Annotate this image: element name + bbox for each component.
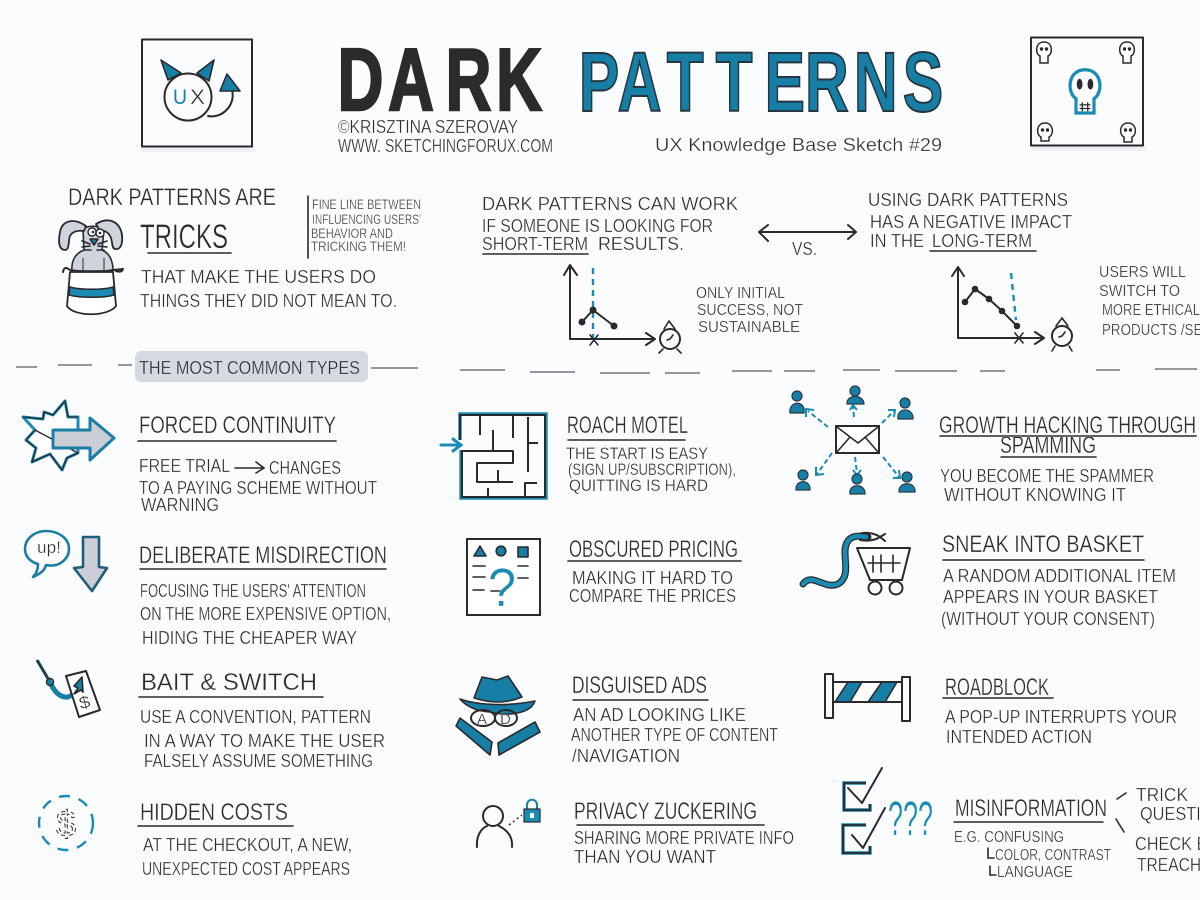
caption: only initial success: ONLY INITIAL bbox=[696, 285, 785, 302]
description: SHARING MORE PRIVATE INFO bbox=[574, 828, 794, 848]
pattern: roadblock bbox=[825, 674, 1177, 747]
heading: ROACH MOTEL bbox=[567, 412, 688, 439]
title: DARK bbox=[338, 32, 542, 130]
icon: alarm clock bbox=[1052, 318, 1072, 351]
description: IN A WAY TO MAKE THE USER bbox=[144, 731, 385, 751]
heading: SPAMMING bbox=[1000, 432, 1096, 459]
icon: speech bubble and down arrow bbox=[25, 531, 107, 591]
caption: users will switch: SWITCH TO bbox=[1099, 283, 1180, 300]
heading: HIDDEN COSTS bbox=[140, 799, 288, 826]
icon: skulls in a box bbox=[1031, 38, 1146, 151]
pattern: privacy zuckering bbox=[477, 798, 794, 867]
pattern: disguised ads bbox=[456, 672, 778, 766]
short-term text: RESULTS. bbox=[598, 234, 684, 254]
icon: person and padlock bbox=[477, 800, 540, 847]
short-term text: DARK PATTERNS CAN WORK bbox=[482, 194, 738, 214]
description: AT THE CHECKOUT, A NEW, bbox=[143, 835, 352, 855]
description bbox=[566, 444, 736, 495]
description: THE START IS EASY bbox=[566, 444, 708, 463]
description: APPEARS IN YOUR BASKET bbox=[943, 587, 1158, 607]
pattern: misinformation bbox=[843, 768, 1200, 881]
description: YOU BECOME THE SPAMMER bbox=[940, 466, 1154, 486]
icon: hook and bait note bbox=[37, 660, 100, 717]
description: /NAVIGATION bbox=[572, 746, 680, 766]
short-term text: IF SOMEONE IS LOOKING FOR bbox=[482, 216, 713, 236]
pattern: deliberate misdirection bbox=[25, 531, 391, 648]
description: E.G. CONFUSING bbox=[954, 829, 1064, 846]
description bbox=[941, 566, 1176, 629]
arrow: versus bbox=[759, 225, 856, 259]
chart: short-term success bbox=[564, 265, 655, 345]
pattern: bait and switch bbox=[37, 660, 385, 771]
section heading: the most common types: THE MOST COMMON TYPES bbox=[139, 358, 360, 378]
description bbox=[140, 707, 385, 771]
caption: only initial success: SUSTAINABLE bbox=[698, 319, 800, 336]
heading: FORCED CONTINUITY bbox=[139, 412, 336, 439]
title: PATTERNS bbox=[579, 35, 943, 129]
icon: UX devil in a box: U bbox=[173, 86, 187, 109]
icon: snake and shopping cart bbox=[803, 533, 910, 594]
description bbox=[571, 705, 778, 766]
short-term text bbox=[482, 194, 738, 254]
definition text bbox=[140, 267, 397, 311]
description: THAN YOU WANT bbox=[574, 847, 716, 867]
long-term text: LONG-TERM bbox=[932, 231, 1032, 251]
heading: OBSCURED PRICING bbox=[569, 536, 738, 563]
heading: DISGUISED ADS bbox=[572, 672, 707, 699]
description: USE A CONVENTION, PATTERN bbox=[140, 707, 371, 727]
icon: checkboxes and question marks: ??? bbox=[888, 793, 933, 846]
icon: road barrier bbox=[825, 674, 910, 721]
author credit bbox=[338, 117, 553, 156]
description bbox=[574, 828, 794, 867]
pattern: growth hacking through spamming bbox=[790, 386, 1196, 505]
heading: BAIT & SWITCH bbox=[141, 669, 317, 696]
icon: price sheet with question mark bbox=[467, 539, 540, 618]
description bbox=[142, 835, 352, 879]
pattern: sneak into basket bbox=[803, 531, 1176, 629]
icon: dashed circle with dollar: $ bbox=[56, 803, 76, 844]
icon: rabbit in a hat bbox=[59, 220, 123, 314]
long-term text: HAS A NEGATIVE IMPACT bbox=[870, 212, 1072, 232]
definition lead-in: DARK PATTERNS ARE bbox=[68, 184, 276, 211]
heading: PRIVACY ZUCKERING bbox=[574, 798, 757, 825]
description: (SIGN UP/SUBSCRIPTION), bbox=[568, 460, 736, 479]
long-term text: USING DARK PATTERNS bbox=[868, 190, 1068, 210]
description: LANGUAGE bbox=[997, 864, 1073, 881]
subtitle: UX Knowledge Base Sketch #29 bbox=[655, 135, 942, 155]
title bbox=[338, 32, 943, 130]
arrow: versus: VS. bbox=[792, 239, 817, 259]
pattern: hidden costs bbox=[39, 796, 352, 879]
heading: DELIBERATE MISDIRECTION bbox=[139, 542, 387, 569]
side note: FINE LINE BETWEEN bbox=[312, 196, 421, 212]
icon: dashed circle with dollar bbox=[39, 796, 93, 850]
icon: checkboxes and question marks bbox=[843, 768, 933, 853]
description: FREE TRIAL bbox=[139, 456, 230, 476]
definition text: THAT MAKE THE USERS DO bbox=[141, 267, 376, 287]
panel: long-term impact bbox=[868, 190, 1200, 351]
short-term text: SHORT-TERM bbox=[482, 234, 588, 254]
icon: speech bubble and down arrow: up! bbox=[37, 538, 61, 557]
description: FALSELY ASSUME SOMETHING bbox=[144, 751, 373, 771]
description: QUITTING IS HARD bbox=[569, 476, 708, 495]
description: TO A PAYING SCHEME WITHOUT bbox=[139, 478, 377, 498]
description bbox=[940, 466, 1154, 505]
description: COLOR, CONTRAST bbox=[995, 847, 1111, 864]
description: HIDING THE CHEAPER WAY bbox=[142, 628, 357, 648]
icon: UX devil in a box bbox=[141, 40, 256, 152]
side note: INFLUENCING USERS' bbox=[312, 211, 421, 227]
icon: hook and bait note: $ bbox=[77, 692, 93, 713]
heading bbox=[939, 412, 1196, 459]
icon: envelope sending to users bbox=[790, 386, 915, 494]
icon: burst and arrow bbox=[23, 401, 114, 470]
icon: spy with hat and glasses: D bbox=[500, 711, 511, 728]
description: (WITHOUT YOUR CONSENT) bbox=[941, 609, 1155, 629]
caption: only initial success: SUCCESS, NOT bbox=[697, 302, 803, 319]
description bbox=[569, 568, 736, 606]
pattern: forced continuity bbox=[23, 401, 377, 515]
heading: ROADBLOCK bbox=[945, 674, 1049, 701]
description: MAKING IT HARD TO bbox=[572, 568, 733, 588]
description: ANOTHER TYPE OF CONTENT bbox=[571, 725, 778, 745]
heading bbox=[567, 412, 688, 440]
description: A RANDOM ADDITIONAL ITEM bbox=[943, 566, 1176, 586]
description: COMPARE THE PRICES bbox=[569, 586, 736, 606]
author credit: WWW. SKETCHINGFORUX.COM bbox=[338, 136, 553, 156]
branch: trick questions and check boxes bbox=[1116, 785, 1200, 875]
panel: definition of dark patterns bbox=[59, 184, 421, 314]
branch: trick questions and check boxes: TRICK bbox=[1136, 785, 1188, 805]
description: AN AD LOOKING LIKE bbox=[573, 705, 746, 725]
icon: spy with hat and glasses bbox=[456, 676, 540, 755]
description: INTENDED ACTION bbox=[946, 727, 1092, 747]
pattern: roach motel bbox=[441, 412, 736, 498]
long-term text bbox=[868, 190, 1072, 251]
heading: tricks: TRICKS bbox=[140, 218, 228, 256]
section heading: the most common types bbox=[135, 351, 368, 382]
panel: short-term results bbox=[482, 194, 803, 353]
long-term text: IN THE bbox=[870, 231, 924, 251]
definition text: THINGS THEY DID NOT MEAN TO. bbox=[140, 291, 397, 311]
description bbox=[945, 707, 1177, 747]
icon: alarm clock bbox=[659, 321, 681, 353]
side note: BEHAVIOR AND bbox=[311, 225, 393, 241]
heading: MISINFORMATION bbox=[955, 795, 1107, 822]
caption: users will switch: USERS WILL bbox=[1099, 264, 1186, 281]
description: FOCUSING THE USERS' ATTENTION bbox=[140, 581, 366, 601]
description: A POP-UP INTERRUPTS YOUR bbox=[945, 707, 1177, 727]
pattern: obscured pricing bbox=[467, 536, 741, 618]
description: ON THE MORE EXPENSIVE OPTION, bbox=[140, 604, 391, 624]
icon: spy with hat and glasses: A bbox=[477, 711, 487, 728]
icon: price sheet with question mark: ? bbox=[488, 558, 516, 618]
chart: long-term decline bbox=[952, 267, 1044, 344]
side note bbox=[308, 196, 421, 258]
description bbox=[140, 581, 391, 648]
icon: UX devil in a box: X bbox=[190, 86, 205, 109]
description: CHANGES bbox=[269, 458, 341, 478]
side note: TRICKING THEM! bbox=[311, 238, 406, 254]
description: WARNING bbox=[141, 495, 219, 515]
description bbox=[954, 829, 1111, 881]
description: WITHOUT KNOWING IT bbox=[944, 485, 1126, 505]
description bbox=[139, 456, 377, 515]
icon: maze bbox=[441, 414, 546, 498]
heading: SNEAK INTO BASKET bbox=[942, 531, 1144, 558]
caption: users will switch bbox=[1099, 264, 1200, 339]
author credit: ©KRISZTINA SZEROVAY bbox=[338, 117, 518, 137]
caption: only initial success bbox=[696, 285, 803, 336]
description: UNEXPECTED COST APPEARS bbox=[142, 859, 350, 879]
